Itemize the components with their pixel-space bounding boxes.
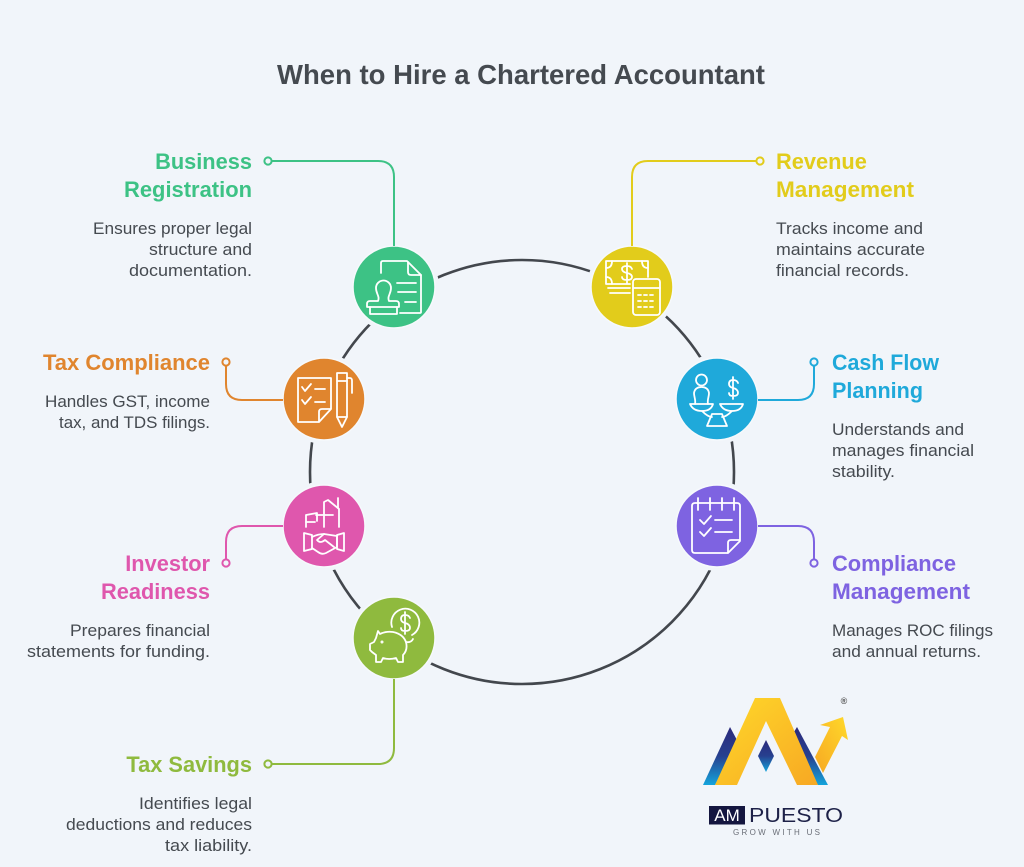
connector: tax savings bbox=[272, 679, 394, 764]
text: business registration: documentation. bbox=[129, 261, 252, 280]
node: business registration bbox=[349, 242, 439, 332]
connector dot: tax compliance bbox=[222, 358, 230, 366]
wordmark: PUESTO bbox=[749, 805, 843, 827]
connector: business registration bbox=[272, 161, 394, 246]
node: tax compliance bbox=[279, 354, 369, 444]
node: investor readiness bbox=[279, 481, 369, 571]
text: cash flow planning: Planning bbox=[832, 378, 923, 403]
connector: cash flow planning bbox=[758, 366, 814, 400]
connector: tax compliance bbox=[226, 366, 283, 400]
node: revenue management bbox=[587, 242, 677, 332]
connector: compliance management bbox=[758, 526, 814, 559]
text: tax savings: tax liability. bbox=[165, 836, 252, 855]
text: investor readiness: Investor bbox=[125, 551, 211, 576]
connector dot: investor readiness bbox=[222, 559, 230, 567]
node: cash flow planning bbox=[672, 354, 762, 444]
text: business registration: Business bbox=[155, 149, 252, 174]
text: cash flow planning: Understands and bbox=[832, 420, 964, 439]
text: investor readiness: statements for funding. bbox=[27, 642, 210, 661]
logo mark bbox=[703, 698, 848, 785]
text: investor readiness: Readiness bbox=[101, 579, 210, 604]
connector dot: business registration bbox=[264, 157, 272, 165]
text: tax compliance: Tax Compliance bbox=[43, 350, 210, 375]
logo: Ampuesto bbox=[703, 696, 848, 837]
icon: person and dollar on scale bbox=[690, 374, 743, 426]
text: revenue management: Tracks income and bbox=[776, 219, 923, 238]
text: cash flow planning: Cash Flow bbox=[832, 350, 939, 375]
icon: piggy bank and coin bbox=[370, 609, 419, 662]
text: business registration: Ensures proper legal bbox=[93, 219, 252, 238]
text: tax savings: Identifies legal bbox=[139, 794, 252, 813]
wordmark: AM bbox=[714, 806, 740, 825]
node: tax savings bbox=[349, 593, 439, 683]
connector: investor readiness bbox=[226, 526, 283, 559]
text: compliance management: Management bbox=[832, 579, 970, 604]
text: compliance management: Manages ROC filings bbox=[832, 621, 993, 640]
icon: document and stamp bbox=[367, 261, 421, 314]
connector dot: tax savings bbox=[264, 760, 272, 768]
icon: money and calculator bbox=[606, 261, 660, 315]
text: tax compliance bbox=[43, 350, 210, 432]
wordmark bbox=[709, 805, 843, 827]
text: tax compliance: tax, and TDS filings. bbox=[59, 413, 210, 432]
text: business registration bbox=[93, 149, 252, 280]
text: business registration: structure and bbox=[149, 240, 252, 259]
tagline: GROW WITH US bbox=[733, 828, 820, 837]
text: cash flow planning bbox=[832, 350, 974, 481]
text: investor readiness: Prepares financial bbox=[70, 621, 210, 640]
connector dot: revenue management bbox=[756, 157, 764, 165]
connector dot: compliance management bbox=[810, 559, 818, 567]
text: investor readiness bbox=[27, 551, 211, 661]
connector: revenue management bbox=[632, 161, 756, 246]
text: cash flow planning: manages financial bbox=[832, 441, 974, 460]
text: business registration: Registration bbox=[124, 177, 252, 202]
registered mark: ® bbox=[841, 696, 848, 706]
text: compliance management: and annual returns. bbox=[832, 642, 981, 661]
text: compliance management: Compliance bbox=[832, 551, 956, 576]
text: revenue management: maintains accurate bbox=[776, 240, 925, 259]
icon: checklist notepad bbox=[692, 498, 740, 553]
title: When to Hire a Chartered Accountant bbox=[277, 59, 765, 90]
central ring bbox=[310, 260, 734, 684]
connector dot: cash flow planning bbox=[810, 358, 818, 366]
icon: checklist and pen bbox=[298, 373, 352, 427]
icon: buildings and handshake bbox=[304, 498, 344, 554]
node: compliance management bbox=[672, 481, 762, 571]
text: revenue management: financial records. bbox=[776, 261, 909, 280]
text: tax savings: Tax Savings bbox=[126, 752, 252, 777]
text: revenue management bbox=[776, 149, 925, 280]
text: tax savings: deductions and reduces bbox=[66, 815, 252, 834]
text: compliance management bbox=[832, 551, 993, 661]
text: cash flow planning: stability. bbox=[832, 462, 895, 481]
text: tax savings bbox=[66, 752, 252, 855]
text: revenue management: Management bbox=[776, 177, 914, 202]
text: tax compliance: Handles GST, income bbox=[45, 392, 210, 411]
text: revenue management: Revenue bbox=[776, 149, 867, 174]
